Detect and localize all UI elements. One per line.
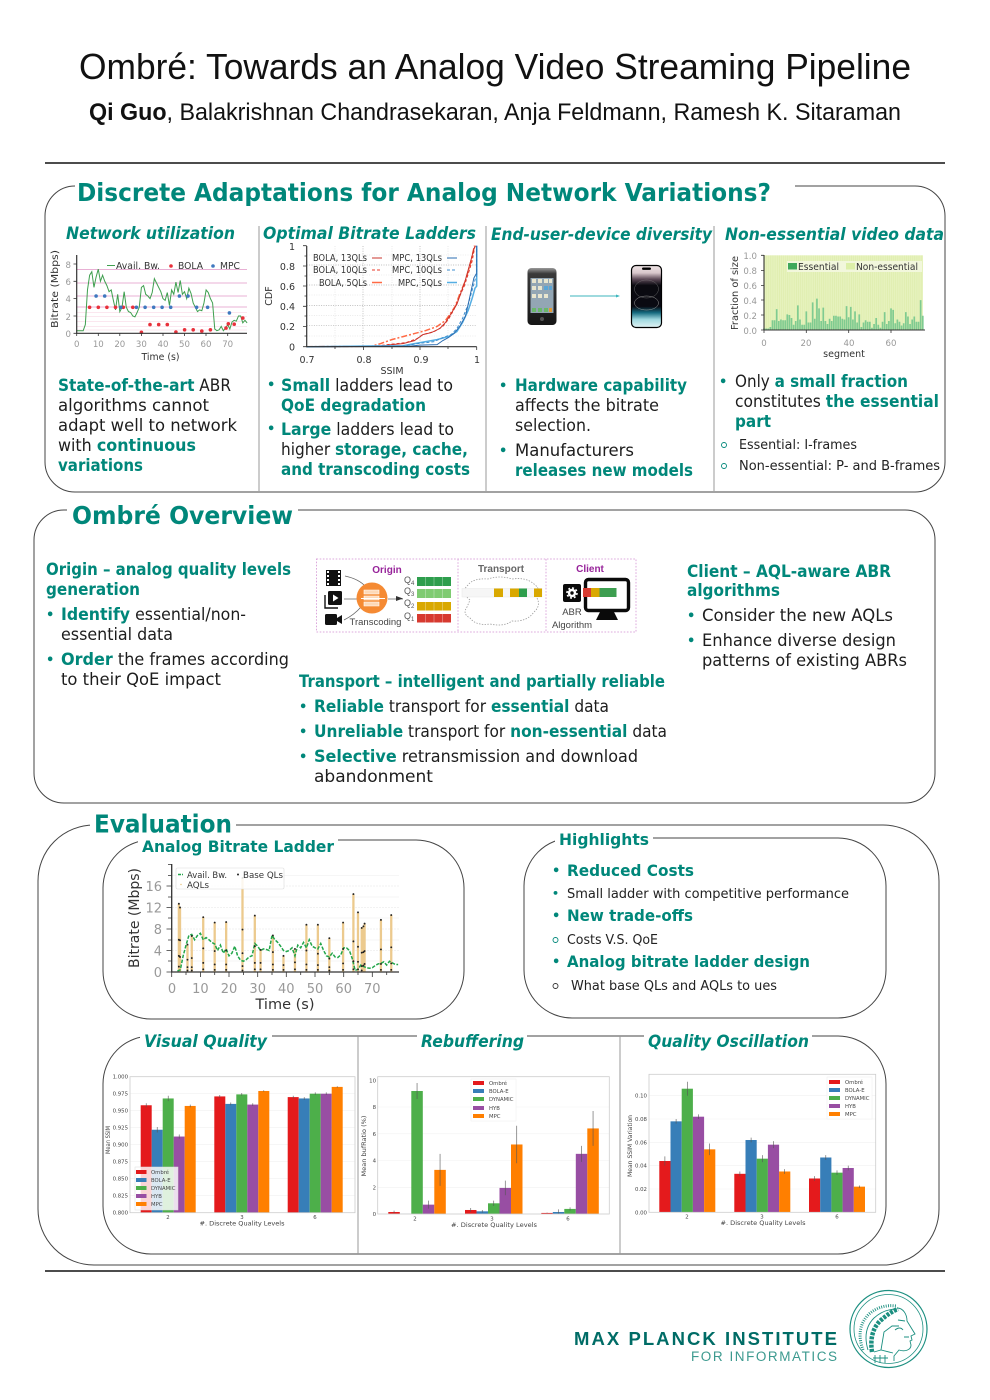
chart: visual quality: 0.875 [113,1160,128,1166]
icon: device upgrade from old phone to new phone [528,266,662,328]
logo: Max Planck Institute: MAX PLANCK INSTITUTE [574,1328,837,1349]
text block: non-essential data: Essential: I-frames [739,438,857,453]
legend: visual quality: BOLA-E [151,1178,171,1184]
quality-level bars: 4 [411,581,415,587]
chart: rebuffering: 4 [373,1158,377,1164]
chart: quality oscillation: 0.10 [635,1094,648,1100]
text block: device diversity: selection. [515,416,591,435]
chart: SSIM CDF: MPC, 10QLs [392,265,442,276]
text block: client: Client – AQL-aware ABR [687,562,891,581]
chart: SSIM CDF: 1 [289,242,295,253]
chart: visual quality: 0.900 [113,1142,129,1148]
chart: SSIM CDF: MPC, 5QLs [398,278,442,289]
logo: Max Planck Institute: FOR INFORMATICS [691,1349,837,1364]
chart: analog bitrate ladder: 4 [154,944,162,960]
legend: visual quality [135,1167,178,1210]
icon: client monitor and ABR: ABR [562,607,582,618]
chart: quality oscillation [627,1074,876,1227]
text block: origin: essential data [61,625,173,644]
icon: camera [325,614,342,625]
chart: quality oscillation: 0.08 [635,1117,648,1123]
heading: optimal bitrate ladders: Optimal Bitrate Ladders [263,224,476,244]
chart: fraction of size per segment [730,252,925,360]
chart: quality oscillation: 2 [685,1214,689,1220]
highlights list [552,861,849,994]
chart: analog bitrate ladder: 70 [364,982,381,997]
diagram: pipeline: Origin [372,565,402,576]
legend: quality oscillation: DYNAMIC [845,1096,870,1102]
text block: device diversity: • [499,444,507,459]
chart: analog bitrate ladder: 8 [154,923,162,938]
chart: SSIM CDF: 0.8 [280,262,295,273]
chart: network utilization: 60 [201,340,211,350]
logo: Max Planck Institute [574,1290,927,1368]
chart: network utilization: 40 [158,340,168,350]
icon: playlist [325,591,342,608]
text block: transport: Selective retransmission and download [314,747,638,766]
chart: rebuffering: 6 [566,1216,570,1222]
chart: visual quality: 0.825 [113,1194,128,1200]
chart: network utilization: 20 [114,340,125,350]
legend: visual quality: MPC [151,1202,163,1208]
text block: transport: • [299,725,307,740]
chart: fraction of size per segment: 0 [761,339,767,349]
chart: fraction of size per segment: 0.8 [743,267,757,277]
chart: fraction of size per segment: 0.0 [743,327,757,337]
highlights list: New trade-offs [567,906,693,925]
chart: rebuffering: 2 [373,1186,376,1192]
text block: origin: generation [46,580,140,599]
chart: rebuffering: 3 [490,1216,494,1222]
text block: non-essential data: part [735,412,771,431]
chart: SSIM CDF: 0.2 [280,322,295,333]
quality-level bars: Q [404,611,411,621]
diagram: pipeline: Transcoding [350,617,401,628]
chart: rebuffering [361,1077,609,1229]
chart: fraction of size per segment: Fraction of size [730,256,741,330]
chart: quality oscillation: #. Discrete Quality Levels [720,1220,806,1227]
quality-level bars: 1 [411,617,415,623]
text block: client: • [687,634,695,649]
legend: visual quality: Ombré [151,1169,169,1176]
text block: client: algorithms [687,581,780,600]
chart: analog bitrate ladder: Avail. Bw. [187,871,227,881]
legend: visual quality: HYB [151,1194,162,1200]
chart: visual quality: Mean SSIM [105,1126,112,1154]
text block: client: patterns of existing ABRs [702,651,907,670]
legend: quality oscillation [827,1077,872,1119]
text block: bitrate ladders: • [267,378,275,393]
highlights list: Costs V.S. QoE [567,933,658,948]
legend: visual quality: DYNAMIC [151,1186,176,1192]
text block: network utilization [58,376,237,475]
text block: device diversity: Hardware capability [515,376,687,395]
chart: fraction of size per segment: 1.0 [743,252,757,262]
text block: bitrate ladders: Large ladders lead to [281,420,454,439]
text block: device diversity: releases new models [515,461,693,480]
text block: device diversity: Manufacturers [515,441,634,460]
text block: origin: • [46,653,54,668]
chart: network utilization: Avail. Bw. [116,261,160,272]
legend: rebuffering: DYNAMIC [489,1097,514,1103]
legend: rebuffering: BOLA-E [489,1089,509,1095]
chart: network utilization: 50 [179,340,190,350]
legend: rebuffering: HYB [489,1106,500,1112]
chart: fraction of size per segment: 40 [844,339,854,349]
chart: network utilization: 6 [66,278,71,288]
chart: fraction of size per segment: segment [823,349,865,360]
highlights list: • [552,864,560,879]
chart: visual quality: 1.000 [113,1074,129,1080]
text block: device diversity: affects the bitrate [515,396,659,415]
chart: quality oscillation: 3 [760,1214,764,1220]
highlights list: Reduced Costs [567,861,694,880]
chart: network utilization: 70 [222,340,233,350]
chart: visual quality: 0.975 [113,1092,128,1098]
chart: analog bitrate ladder [127,864,399,1013]
chart: SSIM CDF: BOLA, 13QLs [313,253,367,264]
heading: rebuffering: Rebuffering [421,1032,524,1052]
panel: evaluation [38,810,939,1265]
highlights list: • [552,909,560,924]
chart: rebuffering: 2 [413,1216,417,1222]
chart: fraction of size per segment: 60 [886,339,896,349]
chart: SSIM CDF: 0.9 [413,355,429,366]
text block: transport: Unreliable transport for non-essential data [314,722,667,741]
chart: SSIM CDF: 0.7 [299,355,315,366]
heading: end-user-device diversity: End-user-device diversity [491,225,713,245]
chart: SSIM CDF [264,242,480,377]
chart: SSIM CDF: 0.6 [280,282,295,293]
legend: quality oscillation: MPC [845,1112,857,1118]
text block: bitrate ladders: QoE degradation [281,396,426,415]
chart: rebuffering: Mean bufRatio (%) [361,1115,368,1177]
legend: rebuffering: MPC [489,1114,501,1120]
heading: discrete adaptations: Discrete Adaptations for Analog Network Variations? [77,178,771,207]
text block: network utilization: adapt well to network [58,416,237,435]
chart: quality oscillation: Mean SSIM Variation [627,1115,634,1177]
chart: visual quality: 0.950 [113,1108,129,1114]
text block: origin: Identify essential/non- [61,605,246,624]
text block: client: Consider the new AQLs [702,606,893,625]
highlights list: What base QLs and AQLs to ues [571,979,777,994]
chart: visual quality: 0.925 [113,1126,128,1132]
quality-level bars: Q [404,586,411,596]
text block: origin: to their QoE impact [61,670,222,689]
chart: SSIM CDF: 0.8 [356,355,372,366]
chart: visual quality: 3 [240,1215,244,1221]
legend: quality oscillation: Ombré [845,1079,863,1086]
text block: transport [299,672,667,786]
text block: origin: Order the frames according [61,650,289,669]
text block: non-essential data: Only a small fraction [735,372,908,391]
text block: transport: abandonment [314,767,434,786]
text block: transport: • [299,750,307,765]
text block: client: • [687,609,695,624]
text block: non-essential data: Non-essential: P- and B-frames [739,459,940,474]
text block: origin [46,560,291,689]
text block: transport: Reliable transport for essential data [314,697,609,716]
chart: network utilization: 2 [66,313,71,323]
heading: network utilization: Network utilization [66,224,235,244]
highlights list: • [552,887,559,900]
chart: rebuffering: 10 [369,1078,377,1084]
chart: rebuffering: 0 [373,1212,377,1218]
chart: network utilization: 10 [93,340,104,350]
chart: network utilization: 30 [136,340,147,350]
panel: analog bitrate ladder [103,834,464,1019]
heading: Ombré overview: Ombré Overview [72,501,293,530]
text block: non-essential data [719,372,940,474]
chart: analog bitrate ladder: AQLs [187,881,209,891]
chart: visual quality: #. Discrete Quality Levels [200,1220,284,1228]
quality-level bars: Q [404,598,411,608]
chart: network utilization: 0 [74,340,79,350]
chart: SSIM CDF: 0.4 [280,302,295,313]
chart: rebuffering: #. Discrete Quality Levels [451,1222,537,1229]
highlights list: Analog bitrate ladder design [567,952,810,971]
heading: non-essential video data: Non-essential video data [725,225,944,245]
chart: network utilization: BOLA [178,261,203,272]
chart: visual quality: 2 [166,1215,170,1221]
diagram: pipeline: Client [576,564,605,575]
panel: result charts [103,1030,886,1254]
chart: quality oscillation: 0.06 [635,1140,648,1146]
panel: highlights [524,830,886,1018]
chart: SSIM CDF: MPC, 13QLs [392,253,442,264]
chart: SSIM CDF: 0 [289,342,295,354]
chart: network utilization [50,250,247,363]
heading: quality oscillation: Quality Oscillation [648,1032,809,1052]
chart: visual quality: 6 [313,1215,317,1221]
icon: cloud transport stream [462,577,542,625]
heading: visual quality: Visual Quality [144,1032,268,1052]
chart: network utilization: 0 [66,330,71,340]
chart: analog bitrate ladder: Base QLs [243,871,283,881]
diagram: pipeline: Transport [478,564,525,575]
icon: Minerva seal [850,1290,927,1368]
text block: network utilization: with continuous [58,436,196,455]
diagram: pipeline [316,559,636,632]
icon: client monitor and ABR [552,580,628,631]
chart: analog bitrate ladder: 0 [168,982,176,997]
quality-level bars: 3 [411,592,415,598]
text block: bitrate ladders: and transcoding costs [281,460,470,479]
panel: discrete adaptations [45,178,945,492]
panel: Ombré overview [34,501,935,803]
text block: origin: • [46,608,54,623]
heading: analog bitrate ladder: Analog Bitrate Ladder [142,837,334,856]
chart: fraction of size per segment: 0.2 [743,312,757,322]
quality-level bars [404,575,451,623]
chart: visual quality: 0.800 [113,1210,129,1216]
text block: origin: Origin – analog quality levels [46,560,291,579]
text block: bitrate ladders [267,376,470,479]
text block: bitrate ladders: higher storage, cache, [281,440,468,459]
legend: quality oscillation: BOLA-E [845,1088,865,1094]
chart: analog bitrate ladder: 20 [221,982,237,997]
text block: client: Enhance diverse design [702,631,896,650]
chart: network utilization: 4 [66,295,71,305]
chart: quality oscillation: 0.02 [635,1187,647,1193]
chart: analog bitrate ladder: 16 [145,880,162,895]
chart: network utilization: Bitrate (Mbps) [50,250,61,328]
chart: SSIM CDF: CDF [264,286,275,306]
text block: non-essential data: • [719,375,727,390]
chart: SSIM CDF: SSIM [380,366,404,377]
text block: transport: Transport – intelligent and partially reliable [299,672,665,691]
chart: analog bitrate ladder: 60 [335,982,352,997]
text block: client [687,562,907,670]
text block: transport: • [299,700,307,715]
text block: bitrate ladders: • [267,422,275,437]
chart: SSIM CDF: BOLA, 5QLs [319,278,367,289]
chart: fraction of size per segment: Non-essential [856,262,918,273]
legend: rebuffering: Ombré [489,1080,507,1087]
icon: client monitor and ABR: Algorithm [552,620,592,631]
text block: device diversity [499,376,693,480]
chart: quality oscillation: 0.00 [635,1210,648,1216]
chart: network utilization: Time (s) [141,352,180,363]
text block: non-essential data: constitutes the essential [735,392,939,411]
heading: evaluation: Evaluation [94,810,232,838]
chart: SSIM CDF: 1 [474,355,480,366]
text block: bitrate ladders: Small ladders lead to [281,376,453,395]
legend: rebuffering [471,1079,516,1121]
chart: rebuffering: 6 [373,1132,377,1138]
highlights list: • [552,955,560,970]
legend: quality oscillation: HYB [845,1104,856,1110]
chart: analog bitrate ladder: 40 [278,982,295,997]
chart: fraction of size per segment: 0.6 [743,282,757,292]
chart: fraction of size per segment: Essential [798,262,839,273]
chart: analog bitrate ladder: 10 [192,982,209,997]
text block: network utilization: algorithms cannot [58,396,210,415]
quality-level bars: 2 [411,604,415,610]
icon: transcoding [356,582,388,614]
text block: device diversity: • [499,379,507,394]
quality-level bars: Q [404,575,411,585]
highlights list: Small ladder with competitive performance [567,887,849,902]
title: Ombré: Towards an Analog Video Streaming Pipeline [79,46,911,87]
text block: network utilization: State-of-the-art ABR [58,376,231,395]
authors: Qi Guo, Balakrishnan Chandrasekaran, Anja Feldmann, Ramesh K. Sitaraman [89,99,901,126]
chart: SSIM CDF: BOLA, 10QLs [313,265,367,276]
text block: network utilization: variations [58,456,143,475]
chart: quality oscillation: 0.04 [635,1164,648,1170]
chart: fraction of size per segment: 20 [801,339,811,349]
chart: visual quality: 0.850 [113,1176,129,1182]
chart: fraction of size per segment: 0.4 [743,297,757,307]
chart: analog bitrate ladder: Bitrate (Mbps) [127,868,143,968]
chart: analog bitrate ladder: 0 [154,966,162,981]
chart: analog bitrate ladder: 50 [307,982,323,997]
icon: film [326,570,341,586]
chart: quality oscillation: 6 [835,1214,839,1220]
chart: network utilization: 8 [66,261,71,271]
chart: analog bitrate ladder: 30 [249,982,266,997]
chart: analog bitrate ladder: Time (s) [255,997,314,1013]
chart: rebuffering: 8 [373,1105,377,1111]
chart: network utilization: MPC [220,261,240,272]
chart: analog bitrate ladder: 12 [145,902,162,916]
chart: visual quality [105,1074,355,1228]
heading: highlights: Highlights [559,830,649,849]
